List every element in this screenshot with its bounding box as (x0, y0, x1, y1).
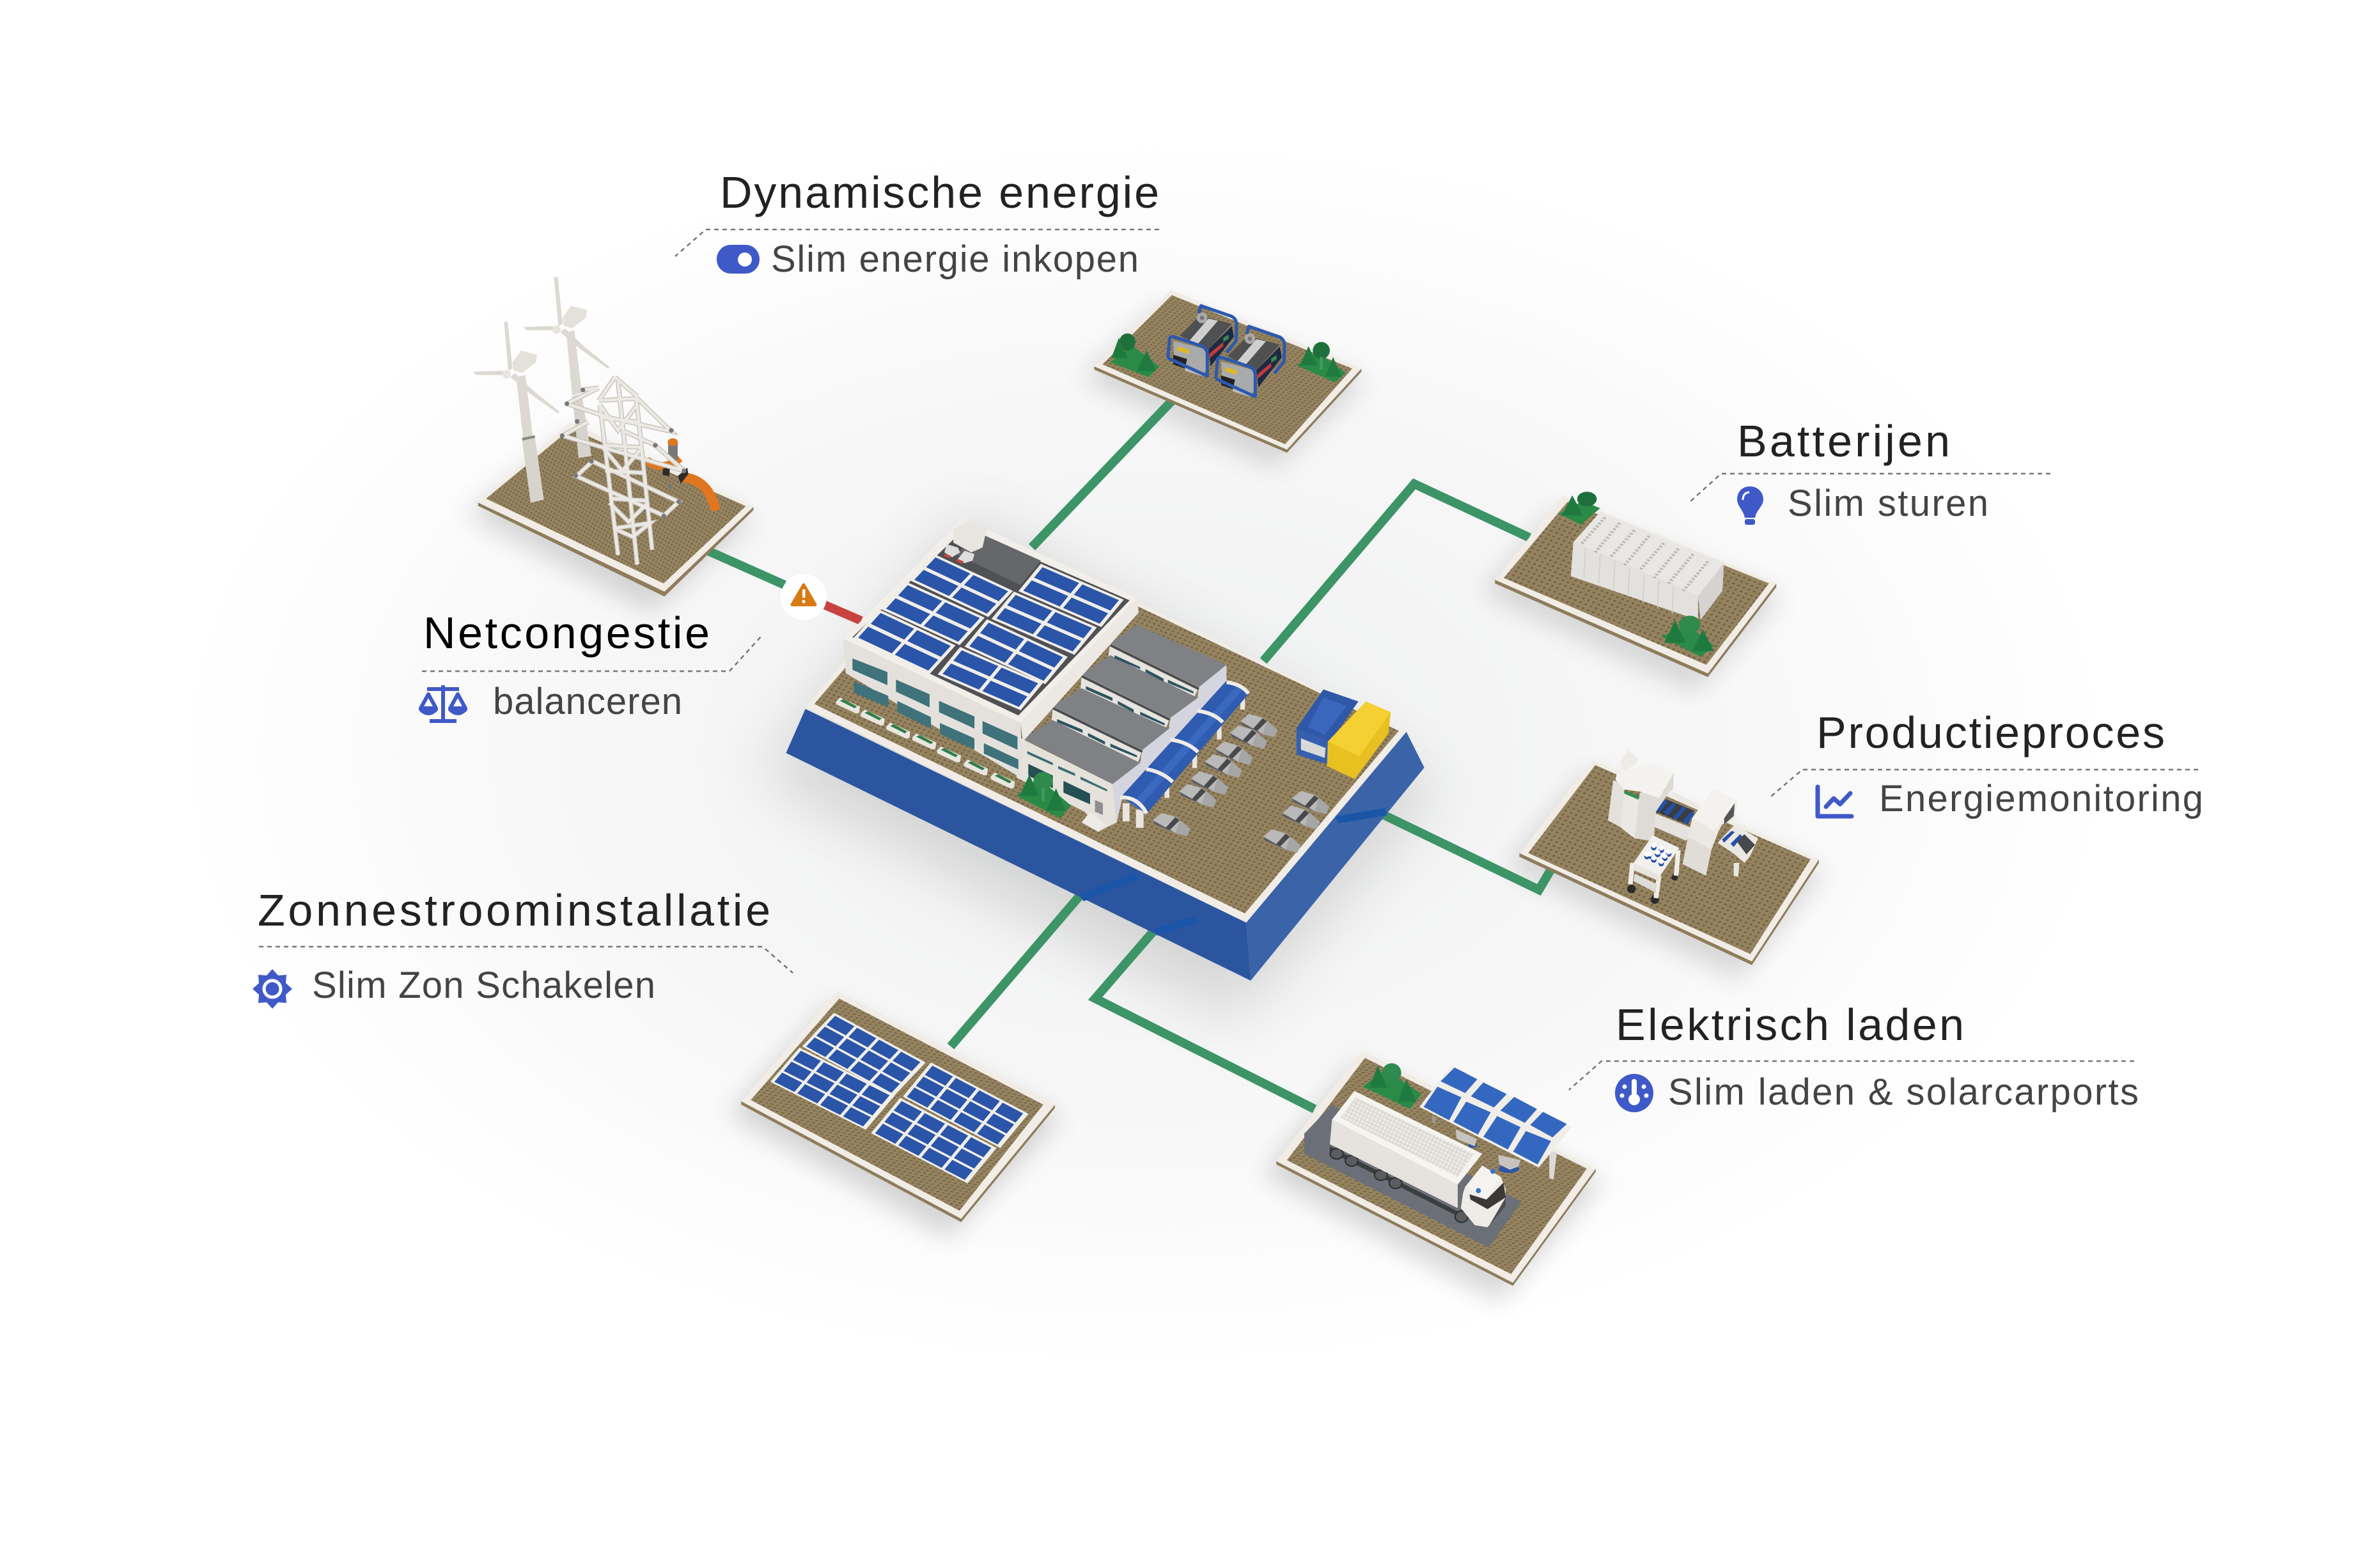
icon: charging gauge (1615, 1074, 1653, 1112)
heading: Netcongestie (423, 608, 710, 658)
plate (1495, 495, 1776, 677)
label: Productieproces (1771, 708, 2203, 819)
roof side wall (1020, 598, 1139, 741)
canopy ribs (1121, 682, 1249, 814)
connector: production (1375, 811, 1551, 890)
tree group (1363, 1063, 1421, 1109)
solar module grid (770, 1013, 1029, 1183)
main building and roof (843, 518, 1139, 779)
panel: charging plate with truck and carport (1276, 1050, 1596, 1286)
blue canopy, tree and cars (1017, 681, 1329, 853)
heading: Zonnestroominstallatie (258, 885, 770, 935)
icon: sun (253, 969, 292, 1009)
roof eaves (1053, 645, 1199, 752)
panel: battery plate (1495, 492, 1776, 677)
plate (1276, 1050, 1596, 1286)
lower building block (1017, 625, 1226, 832)
heading: Productieproces (1816, 708, 2165, 757)
subheading: Slim Zon Schakelen (312, 965, 655, 1006)
icon: toggle (717, 245, 760, 274)
machine two (1216, 327, 1284, 397)
blue container (1297, 689, 1359, 765)
subheading: Energiemonitoring (1879, 778, 2203, 819)
platform rim (806, 518, 1407, 922)
plate (741, 991, 1055, 1222)
right machine (1683, 788, 1737, 876)
icon: light bulb (1737, 486, 1763, 525)
leader line (1569, 1061, 2134, 1090)
connector: charging (1095, 927, 1315, 1109)
solar carport (1419, 1066, 1572, 1168)
connector: batteries (1263, 484, 1529, 661)
subheading: balanceren (493, 681, 682, 722)
plate (1094, 290, 1361, 453)
leader line (675, 229, 1159, 256)
tree bottom (1661, 616, 1714, 657)
label: Elektrisch laden (1569, 1000, 2139, 1113)
heading: Dynamische energie (720, 167, 1159, 217)
label: Dynamische energie (675, 167, 1159, 280)
wall windows (852, 658, 1018, 769)
truck cab (1461, 1165, 1506, 1227)
production line (1608, 750, 1758, 904)
platform ground (815, 525, 1399, 913)
battery container (1571, 512, 1724, 620)
label: Batterijen (1689, 416, 2050, 525)
label: Netcongestie (421, 608, 761, 722)
sawtooth roofs (1023, 625, 1226, 784)
panel: production plate (1520, 750, 1819, 965)
platform right side (1246, 732, 1424, 981)
truck and carport (1304, 1063, 1572, 1248)
middle conveyor (1654, 791, 1699, 841)
trees left (1111, 334, 1159, 377)
tree top (1559, 492, 1600, 525)
shadows under platforms (465, 302, 1825, 1302)
heading: Elektrisch laden (1616, 1000, 1964, 1050)
rooftop unit (944, 520, 987, 563)
panel: dynamic energy plate with machines (1094, 290, 1361, 453)
plate (478, 422, 754, 596)
tree group (1017, 772, 1071, 818)
subheading: Slim sturen (1788, 483, 1988, 524)
panel: solar installation plate (741, 991, 1055, 1222)
machines and trees (1111, 306, 1346, 397)
subheading: Slim energie inkopen (771, 238, 1139, 280)
connector shadows through platform (1081, 812, 1386, 933)
power pylon (560, 377, 687, 564)
canopy roof (1121, 681, 1249, 814)
connector: grid to factory, congested (708, 551, 861, 621)
pavement (1304, 1105, 1522, 1248)
warning marker (781, 574, 827, 620)
platform left side (786, 709, 1251, 981)
wind turbine front (473, 322, 559, 503)
rooftop solar modules (854, 554, 1124, 710)
icon: line chart (1818, 787, 1852, 816)
planters (836, 697, 1015, 789)
wind turbine back (523, 277, 609, 458)
containers (1297, 689, 1391, 779)
leader line (1771, 770, 2198, 796)
right conveyor (1718, 825, 1758, 877)
wind turbines, pipe and pylon (473, 277, 715, 564)
bands under roofs (1052, 644, 1199, 763)
panel: grid plate with wind turbines and pylon (473, 277, 754, 596)
yellow container (1327, 701, 1391, 779)
subheading: Slim laden & solarcarports (1668, 1071, 2139, 1113)
label: Zonnestroominstallatie (253, 885, 793, 1009)
parked cars (1153, 714, 1329, 853)
left machine (1608, 750, 1674, 841)
leader line (259, 947, 793, 973)
bottle cart (1627, 835, 1680, 904)
platform base (786, 518, 1424, 981)
plate (1520, 759, 1819, 965)
front windows (1027, 751, 1107, 804)
trees right (1297, 342, 1346, 382)
strip windows (1057, 655, 1194, 757)
roof (843, 518, 1137, 724)
main building wall (843, 639, 1023, 779)
panel: main factory platform (786, 518, 1424, 981)
connector: dynamic energy (1032, 401, 1172, 547)
icon: balance scale (421, 685, 465, 721)
heading: Batterijen (1737, 416, 1950, 466)
canopy posts (1123, 697, 1245, 828)
leader line (422, 636, 761, 671)
leader line (1689, 474, 2050, 502)
connector: solar installation (951, 895, 1081, 1046)
orange pipe (647, 439, 715, 510)
chargers and posts (1432, 1115, 1557, 1179)
machine one (1168, 306, 1237, 376)
truck (1330, 1091, 1506, 1229)
